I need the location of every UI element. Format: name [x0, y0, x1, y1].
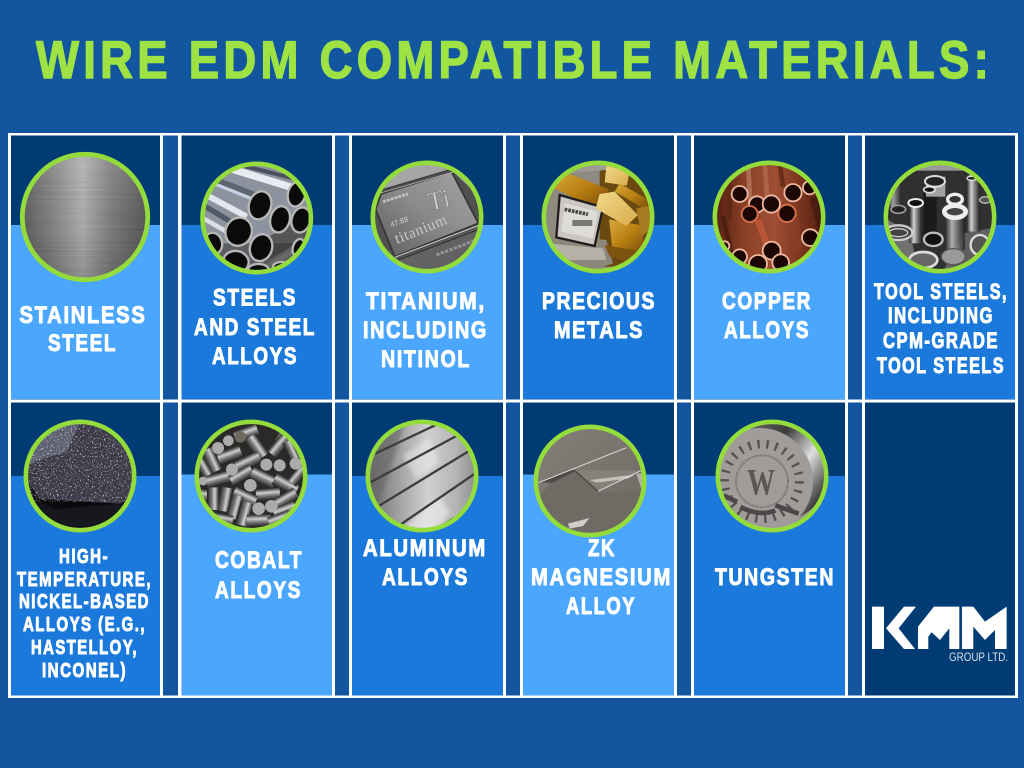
- image: brushed stainless steel: [22, 154, 148, 280]
- label: titanium, including nitinol: TITANIUM,: [366, 288, 486, 315]
- image: titanium plate: Ti: [425, 184, 453, 217]
- panel: nickel-based alloys: [11, 402, 160, 696]
- label: high-temperature, nickel-based alloys: ALLOYS (E.G.,: [23, 613, 146, 636]
- image: dark rock ore: [23, 419, 140, 535]
- panel: aluminum alloys: [352, 402, 503, 696]
- image: tool steel parts: [883, 160, 1000, 277]
- panel: tungsten: [694, 402, 845, 696]
- label: tungsten: TUNGSTEN: [715, 564, 835, 591]
- label: copper alloys: COPPER: [722, 288, 812, 315]
- label: cobalt alloys: [215, 547, 303, 604]
- label: stainless steel: [20, 302, 146, 357]
- label: high-temperature, nickel-based alloys: NICKEL-BASED: [19, 590, 150, 613]
- image: titanium plate: [370, 160, 486, 277]
- label: titanium, including nitinol: NITINOL: [381, 346, 471, 373]
- panel: titanium: [352, 136, 503, 399]
- label: aluminum alloys: ALUMINUM: [363, 535, 487, 562]
- panel: precious metals: [523, 136, 674, 399]
- label: steels and steel alloys: STEELS: [213, 284, 297, 312]
- label: cobalt alloys: ALLOYS: [215, 577, 302, 604]
- label: aluminum alloys: ALLOYS: [382, 564, 469, 591]
- label: tool steels, including cpm-grade tool steels: [874, 279, 1008, 378]
- image: titanium plate: 47.88: [389, 214, 409, 229]
- label: aluminum alloys: [363, 535, 487, 591]
- label: high-temperature, nickel-based alloys: TEMPERATURE,: [17, 568, 152, 591]
- panel: tool steels: [865, 136, 1015, 399]
- panel: cobalt alloys: [182, 402, 332, 696]
- label: copper alloys: ALLOYS: [724, 317, 810, 344]
- image: cobalt cylinders: [194, 420, 308, 532]
- image: titanium plate: titanium: [392, 211, 450, 248]
- panel: zk magnesium alloy: [523, 402, 674, 696]
- label: steels and steel alloys: [194, 284, 316, 370]
- panel: logo: [865, 402, 1015, 696]
- panel: copper alloys: [694, 136, 845, 399]
- label: zk magnesium alloy: [531, 535, 672, 620]
- panel: stainless steel: [11, 136, 160, 399]
- label: stainless steel: STAINLESS: [20, 302, 146, 329]
- label: high-temperature, nickel-based alloys: INCONEL): [42, 659, 127, 682]
- label: zk magnesium alloy: ZK: [588, 535, 616, 562]
- logo: KMM Group Ltd.: [872, 607, 1008, 664]
- label: cobalt alloys: COBALT: [215, 547, 303, 574]
- logo: KMM Group Ltd.: GROUP LTD.: [949, 652, 1008, 664]
- image: copper tubes: [711, 160, 828, 277]
- image: tungsten disc: [716, 420, 828, 532]
- label: zk magnesium alloy: ALLOY: [566, 593, 636, 620]
- label: high-temperature, nickel-based alloys: [17, 545, 152, 682]
- label: precious metals: [542, 288, 656, 344]
- label: titanium, including nitinol: [363, 288, 488, 373]
- label: precious metals: METALS: [554, 317, 644, 344]
- label: high-temperature, nickel-based alloys: HASTELLOY,: [31, 636, 138, 659]
- image: aluminum sheet: [363, 419, 480, 535]
- label: steels and steel alloys: ALLOYS: [212, 343, 298, 370]
- label: high-temperature, nickel-based alloys: HIGH-: [59, 545, 109, 568]
- panel: steels and steel alloys: [182, 136, 332, 399]
- image: tungsten disc: W: [747, 463, 775, 504]
- material grid: [8, 133, 1018, 698]
- image: steel tubes: [200, 160, 313, 275]
- label: steels and steel alloys: AND STEEL: [194, 314, 316, 341]
- image: gold and silver bars: [540, 160, 656, 277]
- image: magnesium sheets: [534, 424, 646, 538]
- label: stainless steel: STEEL: [48, 330, 117, 357]
- label: titanium, including nitinol: INCLUDING: [363, 317, 488, 344]
- label: copper alloys: [722, 288, 812, 344]
- label: zk magnesium alloy: MAGNESIUM: [531, 564, 672, 591]
- label: precious metals: PRECIOUS: [542, 288, 656, 315]
